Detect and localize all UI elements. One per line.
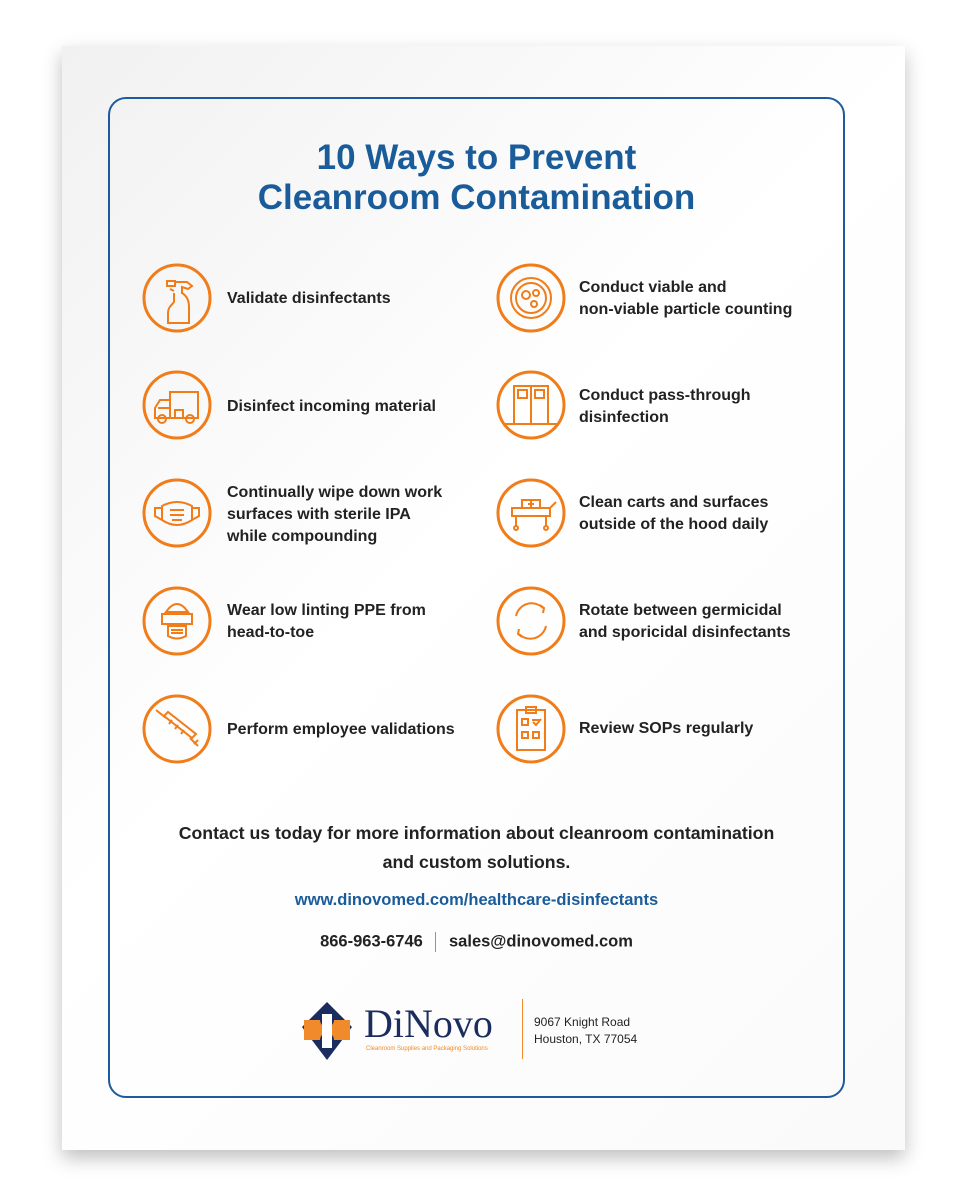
icon: spray bottle <box>142 264 212 332</box>
title: Cleanroom Contamination <box>258 178 695 217</box>
logo: Cleanroom Supplies and Packaging Solutions <box>366 1046 488 1052</box>
text: validate: Validate disinfectants <box>227 290 391 307</box>
title <box>258 138 695 217</box>
text: rotate: and sporicidal disinfectants <box>579 624 791 641</box>
text: ppe: Wear low linting PPE from <box>227 602 426 619</box>
text: rotate: Rotate between germicidal <box>579 602 782 619</box>
icon: rotate <box>496 586 566 656</box>
icon: petri dish <box>496 264 566 332</box>
logo <box>302 1001 493 1060</box>
address: Houston, TX 77054 <box>534 1032 637 1046</box>
icon: cart <box>496 478 566 548</box>
contact text: Contact us today for more information about cleanroom contamination <box>179 823 774 843</box>
website link: www.dinovomed.com/healthcare-disinfectants <box>295 891 658 909</box>
icon: truck <box>142 370 212 440</box>
text: wipe down: surfaces with sterile IPA <box>227 506 411 523</box>
icon: mask <box>142 478 212 548</box>
text: ppe <box>227 602 426 641</box>
address <box>534 1015 637 1046</box>
contact text: and custom solutions. <box>383 852 570 872</box>
icon: syringe <box>142 694 212 764</box>
contact text <box>179 823 774 872</box>
text: pass-through: Conduct pass-through <box>579 387 751 404</box>
text: employee validations: Perform employee validations <box>227 721 455 738</box>
text: particle counting: non-viable particle counting <box>579 301 792 318</box>
frame border <box>108 97 845 1098</box>
text: clean carts: Clean carts and surfaces <box>579 494 768 511</box>
text: ppe: head-to-toe <box>227 624 314 641</box>
text: disinfect incoming: Disinfect incoming material <box>227 398 436 415</box>
icon: pass-through doors <box>496 370 566 440</box>
text: particle counting: Conduct viable and <box>579 279 727 296</box>
logo divider <box>522 999 523 1059</box>
text: wipe down <box>227 484 442 545</box>
icon: clipboard <box>496 694 566 764</box>
text: SOPs: Review SOPs regularly <box>579 720 753 737</box>
title: 10 Ways to Prevent <box>317 138 636 177</box>
phone and email: 866-963-6746 sales@dinovomed.com <box>320 932 633 950</box>
text: clean carts <box>579 494 768 533</box>
text: clean carts: outside of the hood daily <box>579 516 768 533</box>
text: wipe down: while compounding <box>227 528 377 545</box>
address: 9067 Knight Road <box>534 1015 630 1029</box>
text: wipe down: Continually wipe down work <box>227 484 442 501</box>
text: particle counting <box>579 279 792 318</box>
icon: ppe <box>142 586 212 656</box>
text: rotate <box>579 602 791 641</box>
text: pass-through <box>579 387 751 426</box>
text: pass-through: disinfection <box>579 409 669 426</box>
logo: DiNovo <box>364 1001 493 1046</box>
